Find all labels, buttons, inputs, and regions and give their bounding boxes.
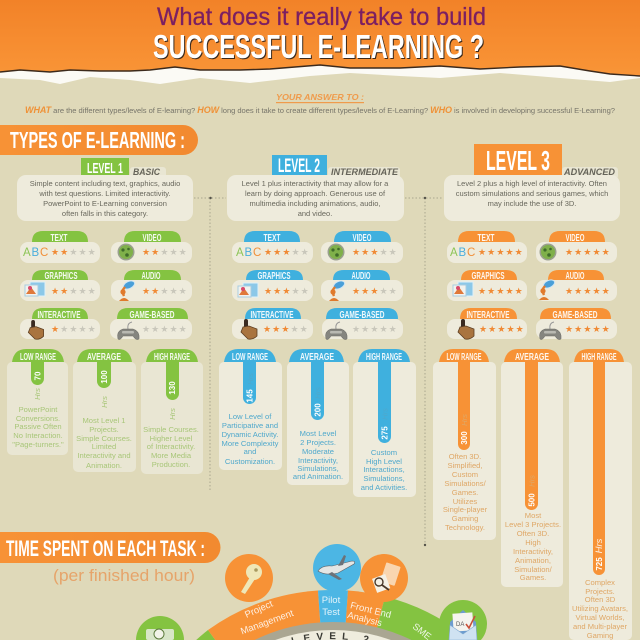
level 2 average: 2 Projects. (300, 438, 336, 447)
label: pilot test (322, 595, 341, 618)
level 1 high range: Simple Courses. (143, 425, 199, 434)
level 2 rating: audio: AUDIO (352, 270, 370, 282)
level 3 high range: Virtual Worlds, (575, 613, 625, 622)
level 1 rating: graphics: ★★★★★ (51, 287, 97, 297)
level 2 description (227, 167, 404, 221)
level 3 high range: Projects. (585, 587, 615, 596)
level 3 rating: interactive: ★★★★★ (479, 325, 525, 335)
label: project management: Management (239, 608, 295, 637)
level 1 rating: audio (111, 270, 192, 301)
level 1 high range: Higher Level (150, 434, 193, 443)
level 3 rating: video (536, 231, 617, 263)
section heading: types of e-learning (0, 125, 198, 155)
level 2 average (287, 349, 349, 485)
level 3 rating: text (447, 231, 527, 263)
wheel segment: pilot test (318, 590, 348, 640)
title line 1: What does it really take to build (157, 3, 486, 31)
level 2 rating: game-based: GAME-BASED (340, 309, 385, 321)
level 3 rating: video: VIDEO (566, 232, 584, 244)
icon: airplane (313, 544, 361, 592)
level 1 rating: video: ★★★★★ (142, 248, 188, 258)
level 3 high range: Hrs (594, 538, 605, 553)
level 2 rating: game-based: ★★★★★ (352, 325, 398, 335)
level 3 average: Interactivity, (513, 547, 553, 556)
level 2 high range (353, 349, 416, 497)
level 2 low range: Dynamic Activity. (222, 430, 278, 439)
level 1 rating: text (20, 231, 100, 263)
level 2 high range: Hrs (380, 408, 390, 420)
level 1 description: with test questions. Limited interactivity. (38, 189, 171, 198)
level 3 average: Simulation/ (514, 565, 553, 574)
wheel segment: sme (374, 596, 470, 640)
level 3 description (444, 167, 620, 221)
level 2 description: learn by doing approach. Generous use of (245, 189, 386, 198)
level 3 low range: Single-player (443, 505, 488, 514)
level 1 rating: interactive: INTERACTIVE (38, 309, 80, 321)
wheel inner ring (254, 622, 412, 640)
label: pilot test: Test (322, 607, 340, 618)
wheel chart (196, 590, 445, 640)
level 1 high range: 130 (168, 381, 177, 395)
level 1 description (17, 167, 193, 221)
level 2 average: Simulations, (297, 464, 339, 473)
level 1 average: Hrs (100, 396, 109, 408)
level 2 rating: text: ★★★★★ (264, 248, 310, 258)
label: front end analysis (346, 600, 392, 629)
level 3 average: Level 3 Projects. (505, 520, 561, 529)
level 2 rating: interactive (232, 308, 313, 339)
wheel segment: level 1 side green (196, 630, 215, 640)
level 1 average: Projects. (89, 425, 119, 434)
level 2 rating: game-based (322, 308, 403, 340)
level 3 low range (433, 349, 496, 540)
icon: magnifier on document (360, 554, 408, 602)
level 1 description: Simple content including text, graphics, audio (30, 179, 180, 188)
level 1 low range: Passive Often (14, 422, 62, 431)
level 3 high range: 725 (595, 557, 604, 571)
level 3 rating: video: ★★★★★ (565, 248, 611, 258)
section heading: time spent (0, 532, 220, 563)
level 3 low range: Often 3D. (449, 452, 481, 461)
icon: envelope (439, 600, 487, 640)
level 2 high range: Custom (371, 448, 397, 457)
level 3 badge: LEVEL 3 (486, 145, 550, 176)
level 1 rating: text: ABC (23, 247, 49, 259)
level 2 average: Hrs (314, 387, 322, 399)
level 1 low range (7, 349, 68, 455)
level 1 low range: Hrs (33, 388, 42, 400)
level 1 average: Animation. (86, 461, 122, 470)
level 1 low range: LOW RANGE (20, 351, 56, 363)
level 1 badge: LEVEL 1 (87, 160, 123, 177)
level 3 average: Hrs (528, 475, 536, 487)
level 3 average: Often 3D. (517, 529, 549, 538)
level 3 rating: game-based: GAME-BASED (552, 309, 598, 321)
level 1 rating: interactive: ★★★★★ (51, 325, 97, 335)
label: front end analysis: Analysis (346, 610, 383, 629)
level 3 rating: interactive: INTERACTIVE (466, 309, 510, 321)
level 1 rating: video (111, 231, 192, 263)
icon: envelope: DA (456, 622, 464, 628)
level 3 average: Games. (520, 573, 546, 582)
level 1 high range (141, 349, 203, 474)
level 1 average: Limited (92, 442, 116, 451)
level 3 description: Level 2 plus a high level of interactivity. Often (457, 179, 607, 188)
level 2 high range: Interactions, (363, 465, 405, 474)
level 3 rating: text: ★★★★★ (478, 248, 524, 258)
level 2 high range: Simulations, (363, 474, 405, 483)
level 2 description: Level 1 plus interactivity that may allow for a (242, 179, 389, 188)
level 3 high range: and Multi-player (573, 622, 627, 631)
panel: level 1 (7, 158, 203, 474)
level 1 low range: No Interaction. (13, 431, 63, 440)
level 2 low range (219, 349, 282, 470)
level 2 rating: graphics: GRAPHICS (258, 270, 290, 282)
level 3 low range: Utilizes (453, 497, 477, 506)
level 1 average: Interactivity and (77, 451, 131, 460)
level 3 low range: Hrs (460, 414, 469, 426)
icon: key (225, 554, 273, 602)
level 1 high range: Hrs (168, 408, 177, 420)
level 2 average: and Animation. (293, 472, 343, 481)
level 3 low range: Simplified, (447, 461, 483, 470)
level 3 rating: audio (536, 270, 617, 301)
level 2 average: Interactivity, (298, 456, 338, 465)
level 3 high range: Complex (585, 578, 615, 587)
level 1 rating: game-based: GAME-BASED (130, 309, 175, 321)
level 3 rating: graphics (447, 270, 527, 301)
level 3 low range: Games. (452, 488, 478, 497)
label: project management: Project (243, 599, 275, 621)
title line 2: SUCCESSFUL E-LEARNING ? (153, 28, 484, 65)
level 1 low range: 70 (34, 371, 42, 380)
level 2 low range: More Complexity (222, 439, 279, 448)
level 3 rating: interactive (447, 308, 527, 339)
level 3 high range: Utilizing Avatars, (572, 604, 628, 613)
level 2 average: Most Level (300, 429, 337, 438)
level 2 high range: and Activities. (361, 483, 407, 492)
level 2 average: Moderate (302, 447, 334, 456)
level 1 description: often falls in this category. (62, 209, 148, 218)
level 3 rating: audio: ★★★★★ (565, 287, 611, 297)
level 2 rating: text (232, 231, 313, 263)
header banner with torn edge (0, 0, 640, 84)
level 1 average: Most Level 1 (82, 416, 126, 425)
level 3 low range: 300 (460, 431, 469, 445)
level 1 average (73, 349, 136, 472)
level 2 rating: text: ABC (236, 247, 262, 259)
level 1 low range: PowerPoint (19, 405, 58, 414)
level 3 rating: text: TEXT (478, 232, 495, 244)
level 2 high range: HIGH RANGE (366, 351, 402, 363)
section heading: time spent: TIME SPENT ON EACH TASK : (6, 536, 205, 561)
intro questions: WHAT are the different types/levels of E-learning? HOW long does it take to create different types/levels of E-Learning? WHO is involved in developing successful E-Learning? (25, 105, 615, 115)
level 1 rating: graphics (20, 270, 100, 301)
level 3 description: custom simulations and serious games, which (456, 189, 608, 198)
level 1 rating: game-based (110, 308, 192, 340)
level 3 low range: LOW RANGE (446, 351, 482, 363)
wheel segment: front end analysis (344, 590, 385, 640)
level 2 average: AVERAGE (300, 351, 334, 363)
level 3 average: High (525, 538, 541, 547)
label: pilot test: Pilot (322, 595, 341, 606)
panel: level 2 (219, 155, 416, 497)
level 3 low range: Technology. (445, 523, 485, 532)
level 1 high range: HIGH RANGE (154, 351, 190, 363)
level 1 high range: Production. (152, 460, 190, 469)
level 3 low range: Custom (452, 470, 478, 479)
level 2 high range: High Level (366, 457, 402, 466)
level 3 rating: graphics: GRAPHICS (472, 270, 504, 282)
level 3 average (501, 349, 563, 587)
level 1 rating: text: TEXT (50, 232, 68, 244)
level 1 average: AVERAGE (87, 351, 121, 363)
level 3 description: may include the use of 3D. (488, 199, 576, 208)
level 3 description: ADVANCED (563, 167, 615, 177)
level 3 average: Most (525, 511, 542, 520)
label: front end analysis: Front End (349, 600, 392, 621)
level 3 rating: game-based (536, 308, 617, 340)
level 2 average: 200 (314, 403, 322, 417)
level 1 rating: audio: ★★★★★ (142, 287, 188, 297)
panel: level 3 (433, 144, 632, 640)
level 1 description: BASIC (133, 167, 160, 177)
level 2 low range: Low Level of (229, 412, 272, 421)
level 2 rating: interactive: INTERACTIVE (250, 309, 294, 321)
level 1 rating: text: ★★★★★ (51, 248, 97, 258)
level 2 rating: video (321, 231, 403, 263)
level 2 low range: 145 (246, 389, 254, 403)
level 3 badge (474, 144, 562, 176)
level 1 high range: of Interactivity. (147, 442, 195, 451)
level 1 low range: Conversions. (16, 414, 60, 423)
level 1 badge (81, 158, 129, 177)
level 3 rating: graphics: ★★★★★ (478, 287, 524, 297)
level 3 rating: audio: AUDIO (566, 270, 584, 282)
level 2 rating: graphics: ★★★★★ (264, 287, 310, 297)
level 3 average: AVERAGE (515, 351, 549, 363)
level 2 rating: video: ★★★★★ (352, 248, 398, 258)
level 2 low range: Hrs (246, 373, 255, 385)
level 1 rating: audio: AUDIO (142, 270, 160, 282)
level 2 low range: LOW RANGE (232, 351, 268, 363)
level 3 average: Animation, (515, 556, 551, 565)
level 2 low range: Participative and (222, 421, 278, 430)
level 2 rating: graphics (232, 270, 313, 301)
section heading: types of e-learning: TYPES OF E-LEARNING : (10, 127, 185, 153)
level 2 description: multimedia including animations, audio, (250, 199, 380, 208)
level 1 average: Simple Courses. (76, 434, 132, 443)
level 3 high range (569, 349, 632, 640)
level 2 low range: and (244, 447, 256, 456)
level 1 rating: game-based: ★★★★★ (142, 325, 188, 335)
your answer to heading: YOUR ANSWER TO : (276, 92, 364, 102)
level 3 average: 500 (528, 493, 536, 507)
level 1 description: PowerPoint to E-Learning conversion (43, 199, 167, 208)
level 2 low range: Customization. (225, 457, 275, 466)
level 1 rating: video: VIDEO (142, 232, 162, 244)
level 3 high range: Gaming (587, 631, 613, 640)
level 1 low range: "Page-turners." (12, 440, 64, 449)
level 3 low range: Gaming (452, 514, 478, 523)
level 3 rating: game-based: ★★★★★ (565, 325, 611, 335)
level 1 rating: interactive (20, 308, 100, 339)
level 2 badge: LEVEL 2 (278, 156, 320, 177)
level 3 low range: Simulations/ (444, 479, 487, 488)
icon: camera (136, 616, 184, 640)
subheading: per finished hour: (per finished hour) (53, 566, 195, 585)
level 1 average: 100 (100, 370, 109, 384)
level 2 description: and video. (298, 209, 332, 218)
level 1 rating: graphics: GRAPHICS (44, 270, 78, 282)
wheel segment: project management (208, 590, 322, 640)
level 2 rating: audio (321, 270, 403, 301)
level 3 high range: Often 3D (585, 595, 616, 604)
dotted connectors (194, 197, 443, 546)
level 2 rating: interactive: ★★★★★ (263, 325, 309, 335)
level 2 rating: audio: ★★★★★ (352, 287, 398, 297)
level 3 rating: text: ABC (450, 247, 476, 259)
level 2 description: INTERMEDIATE (331, 167, 399, 177)
level 2 high range: 275 (380, 426, 390, 440)
level 2 rating: text: TEXT (264, 232, 281, 244)
level 2 rating: video: VIDEO (352, 232, 372, 244)
level 1 high range: More Media (151, 451, 192, 460)
level 2 badge (272, 155, 327, 177)
